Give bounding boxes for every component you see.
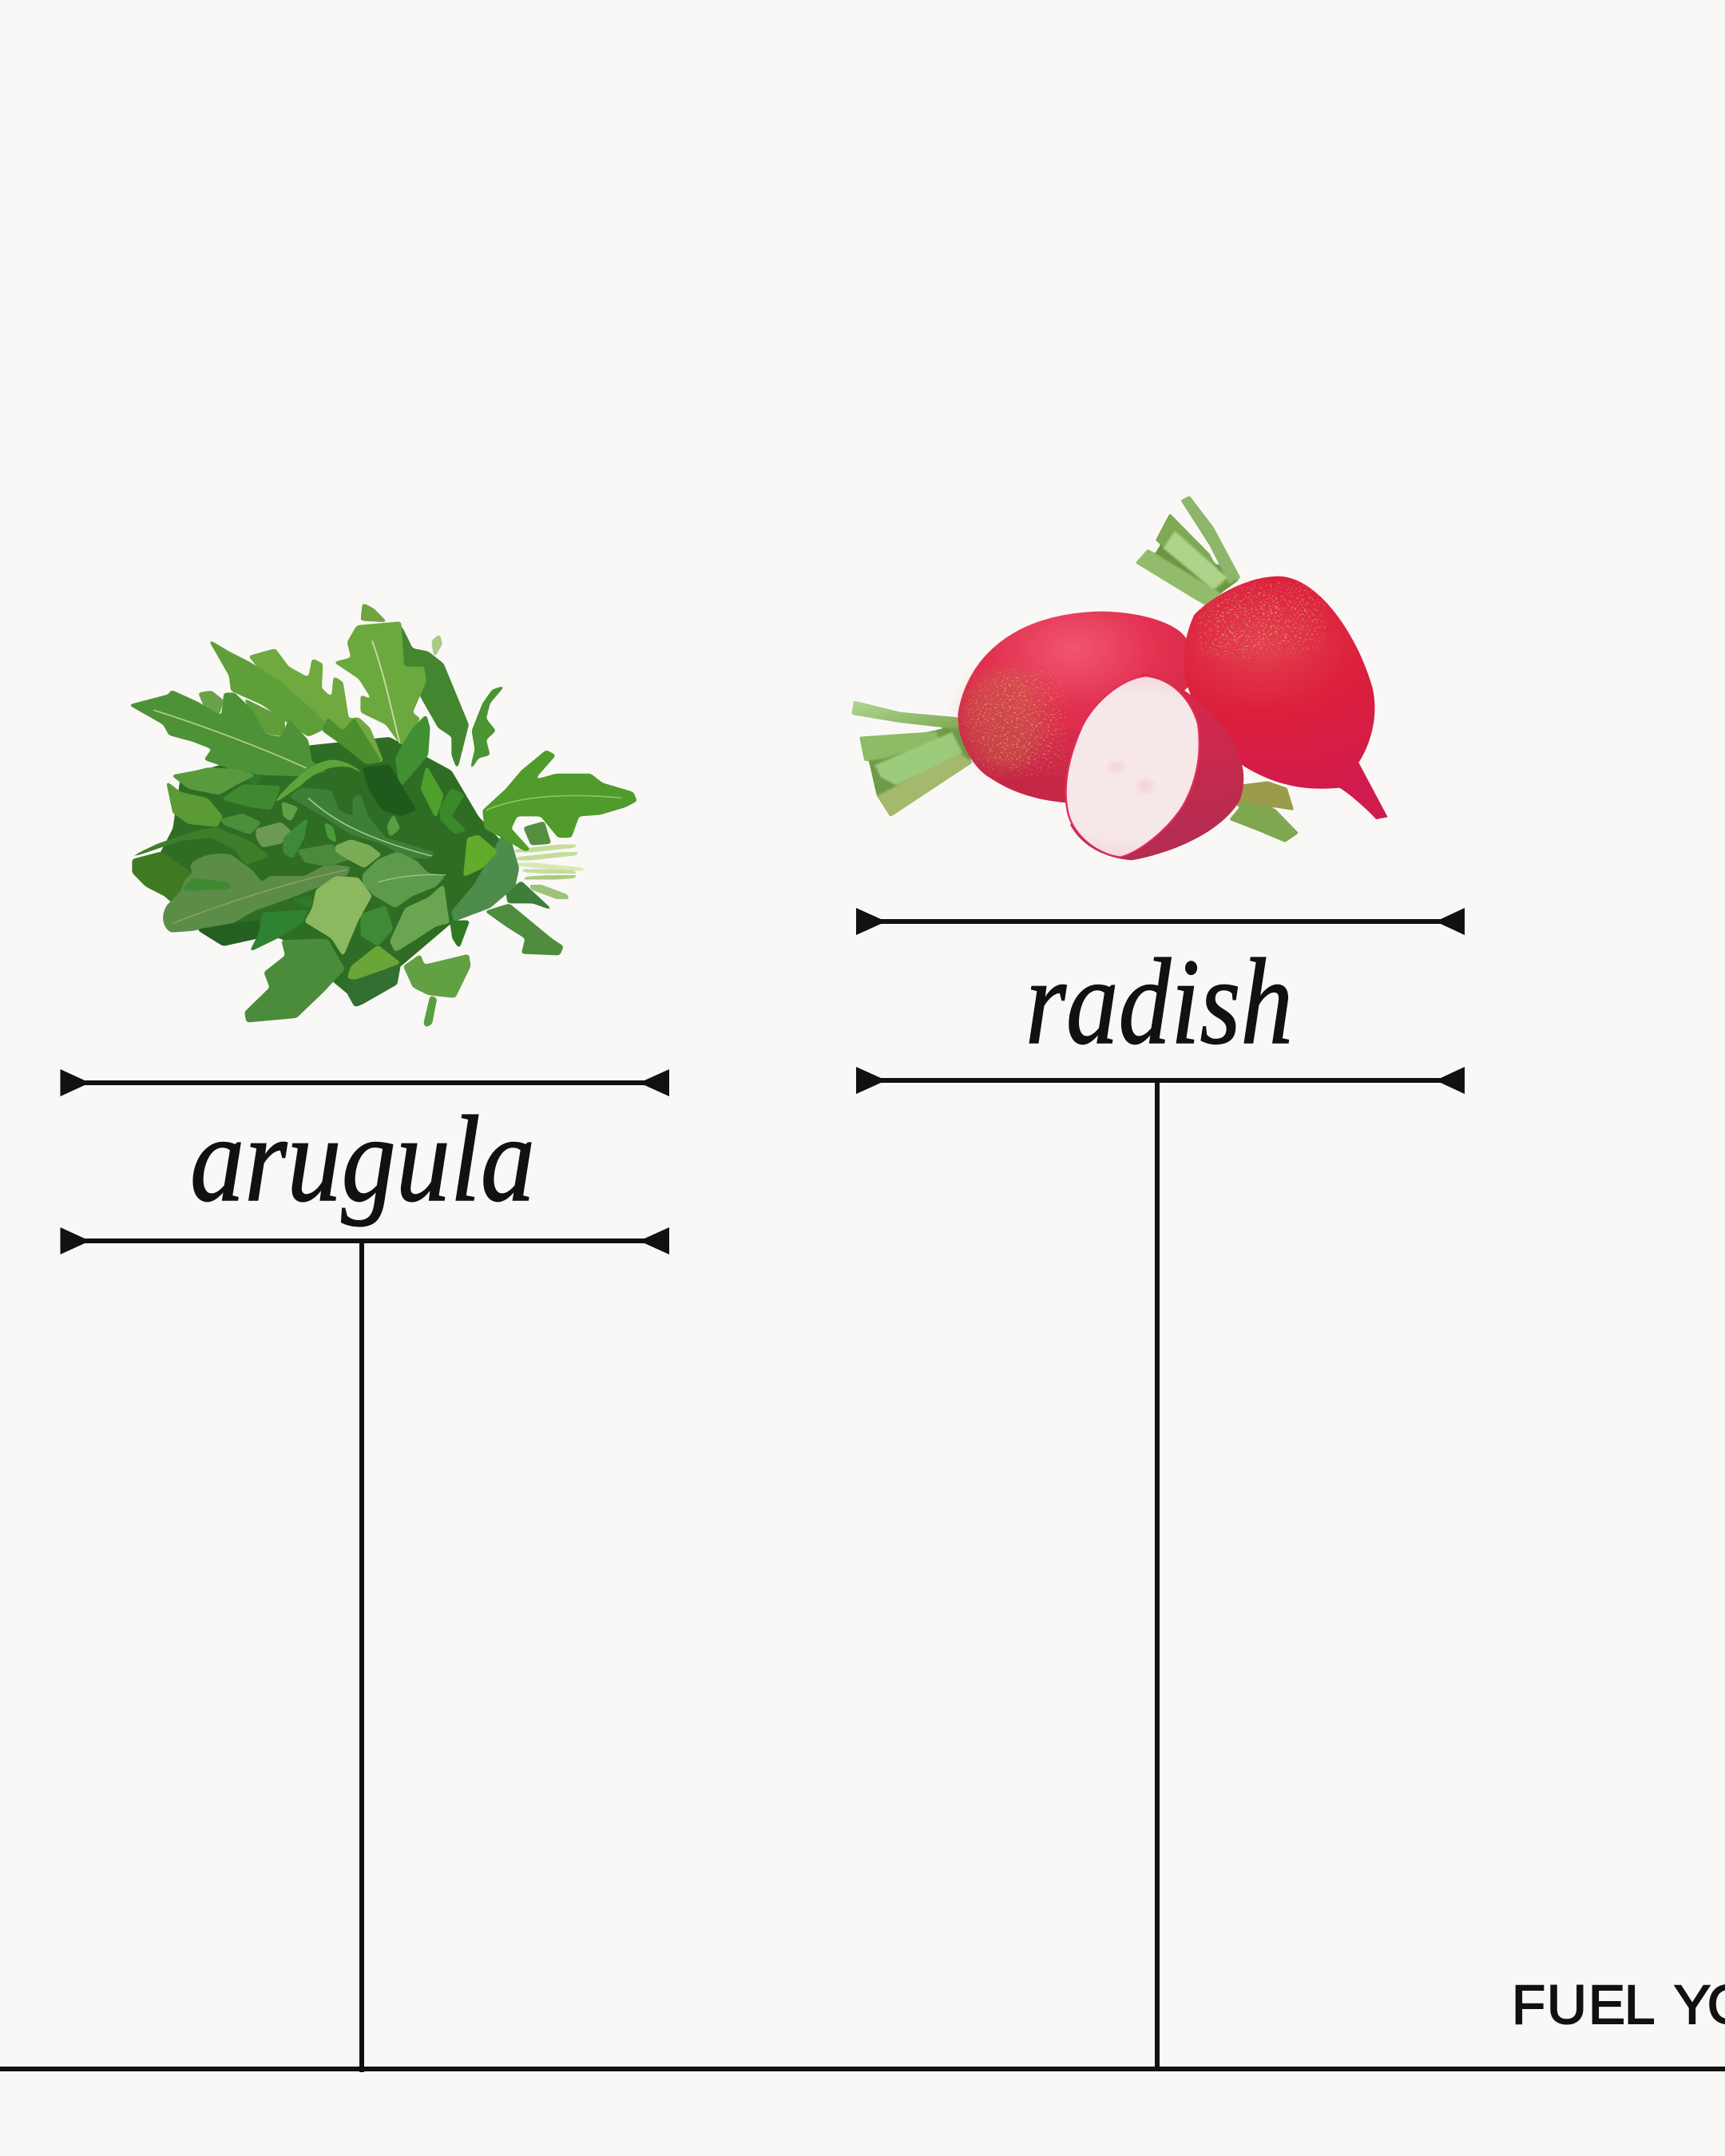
midrib — [372, 640, 399, 743]
label: arugula — [61, 1069, 669, 2072]
midrib — [486, 795, 622, 810]
lower left big leaf — [163, 854, 351, 933]
upper left leaf — [129, 690, 327, 777]
illustration: arugula bunch — [118, 602, 637, 1028]
word: arugula: arugula — [190, 1092, 535, 1227]
stem line — [1155, 1083, 1160, 2071]
bottom rule with arrows — [61, 1227, 669, 1254]
left small leaves — [171, 767, 256, 795]
baseline rule — [0, 2067, 1725, 2071]
top centre leaf — [333, 621, 426, 746]
dark leaf mass — [145, 737, 510, 997]
right radish body — [1184, 577, 1388, 819]
speckles on left radish — [962, 668, 1065, 777]
bottom leaf and stem — [403, 954, 471, 998]
midrib — [378, 874, 446, 882]
mid rounded leaves — [335, 839, 382, 868]
right radish stems — [1136, 496, 1240, 605]
top rule with arrows — [61, 1069, 669, 1096]
top rule with arrows — [856, 908, 1465, 935]
half radish flesh — [1066, 676, 1200, 857]
illustration: radishes — [851, 496, 1388, 860]
big right leaf — [482, 750, 637, 851]
midrib — [172, 870, 347, 923]
half radish skin — [1070, 673, 1243, 860]
bottom rule with arrows — [856, 1067, 1465, 1094]
pink core marks — [1110, 761, 1153, 794]
midrib — [308, 798, 432, 856]
midrib — [153, 710, 307, 768]
label: radish — [856, 908, 1465, 2071]
stem line — [359, 1243, 364, 2072]
speckles on right radish — [1198, 581, 1326, 660]
left radish body — [958, 612, 1188, 803]
centre leaves — [272, 760, 367, 806]
word: radish: radish — [1025, 934, 1293, 1070]
left radish stems — [851, 700, 973, 817]
back leaves — [198, 602, 564, 955]
tan bloom on left radish — [966, 668, 1043, 769]
half radish bottom stem — [1229, 781, 1299, 842]
pale stems — [518, 846, 581, 898]
